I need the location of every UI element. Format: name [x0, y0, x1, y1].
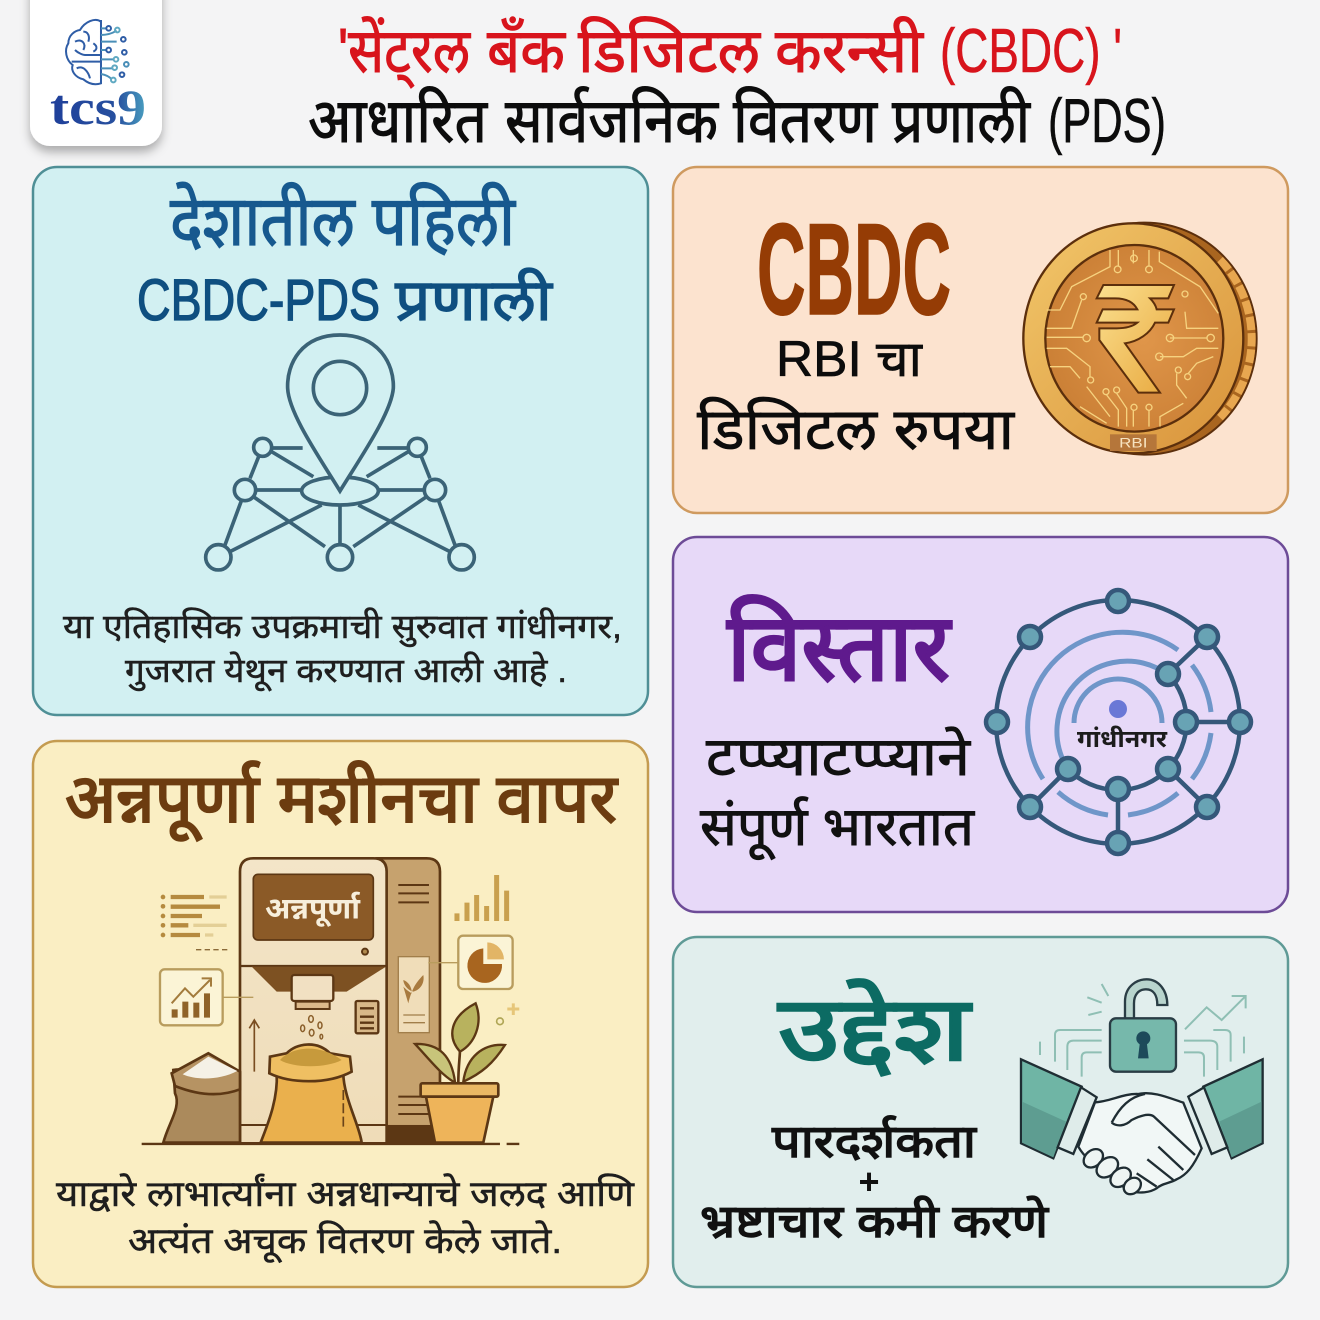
illustration: dispensing machine: अन्नपूर्णा	[265, 891, 361, 927]
CBDC heading: CBDC	[757, 196, 951, 342]
cuffs	[1058, 1087, 1097, 1154]
logo wordmark: tcs9	[50, 79, 146, 135]
icon: brain circuit	[66, 20, 129, 84]
transparency text: पारदर्शकता	[772, 1115, 977, 1167]
icon: rupee coin	[1023, 223, 1257, 455]
title	[308, 15, 1166, 156]
left chart card	[160, 969, 223, 1025]
expansion line 1: टप्प्याटप्प्याने	[706, 726, 971, 787]
right pie card	[458, 936, 513, 989]
title line 2: वितरण	[733, 86, 878, 156]
icon: location pin network	[206, 335, 474, 570]
title line 2: (PDS)	[1048, 87, 1166, 156]
expansion line 2: संपूर्ण भारतात	[700, 796, 975, 861]
right sleeve	[1203, 1059, 1263, 1158]
description line 2: गुजरात येथून करण्यात आली आहे .	[125, 651, 567, 691]
panel: objective	[673, 937, 1288, 1287]
panel: Annapurna machine	[33, 741, 648, 1287]
title line 1: डिजिटल	[578, 16, 762, 86]
digital rupee subtitle: डिजिटल रुपया	[697, 397, 1015, 462]
reduce corruption text: भ्रष्टाचार कमी करणे	[700, 1194, 1049, 1247]
heading line 2: CBDC-PDS	[137, 268, 380, 333]
description line 1: याद्वारे लाभार्त्यांना अन्नधान्याचे जलद आणि	[56, 1173, 635, 1214]
title line 1: (CBDC) '	[940, 17, 1122, 86]
title line 2	[308, 86, 1166, 156]
ground line	[142, 1140, 519, 1147]
plant	[458, 1050, 460, 1083]
heading: अन्नपूर्णा मशीनचा वापर	[65, 761, 618, 841]
plus sign: +	[858, 1161, 880, 1202]
hands	[1078, 1093, 1202, 1192]
title line 1: करन्सी	[775, 16, 924, 86]
bar cluster	[457, 875, 507, 921]
icon: concentric node network: गांधीनगर	[1077, 725, 1167, 753]
heading: उद्देश	[778, 979, 972, 1080]
title line 1: 'सेंट्रल	[338, 16, 471, 89]
pot	[426, 1097, 493, 1143]
title line 1	[338, 15, 1122, 89]
illustration: dispensing machine	[142, 858, 519, 1144]
heading: विस्तार	[727, 595, 951, 700]
icon: concentric node network	[986, 590, 1251, 854]
left sleeve	[1021, 1059, 1082, 1158]
icon: open lock and handshake	[1021, 979, 1263, 1198]
title line 2: आधारित	[308, 86, 489, 156]
title line 1: बँक	[487, 15, 566, 86]
center sack	[261, 1073, 362, 1143]
description line 2: अत्यंत अचूक वितरण केले जाते.	[128, 1220, 562, 1263]
icon: rupee coin: RBI	[1119, 435, 1147, 451]
text list	[161, 895, 165, 937]
panel: expansion	[673, 537, 1288, 912]
heading line 2: प्रणाली	[395, 268, 553, 333]
heading line 1: देशातील पहिली	[170, 181, 517, 260]
logo card	[30, 0, 162, 146]
RBI subtitle: RBI चा	[776, 331, 923, 387]
title line 2: प्रणाली	[892, 86, 1031, 156]
left sack	[163, 1069, 240, 1143]
description line 1: या एतिहासिक उपक्रमाची सुरुवात गांधीनगर,	[63, 608, 622, 647]
panel: first CBDC-PDS system	[33, 167, 648, 715]
panel: CBDC digital rupee	[673, 167, 1288, 513]
title line 2: सार्वजनिक	[505, 86, 719, 156]
